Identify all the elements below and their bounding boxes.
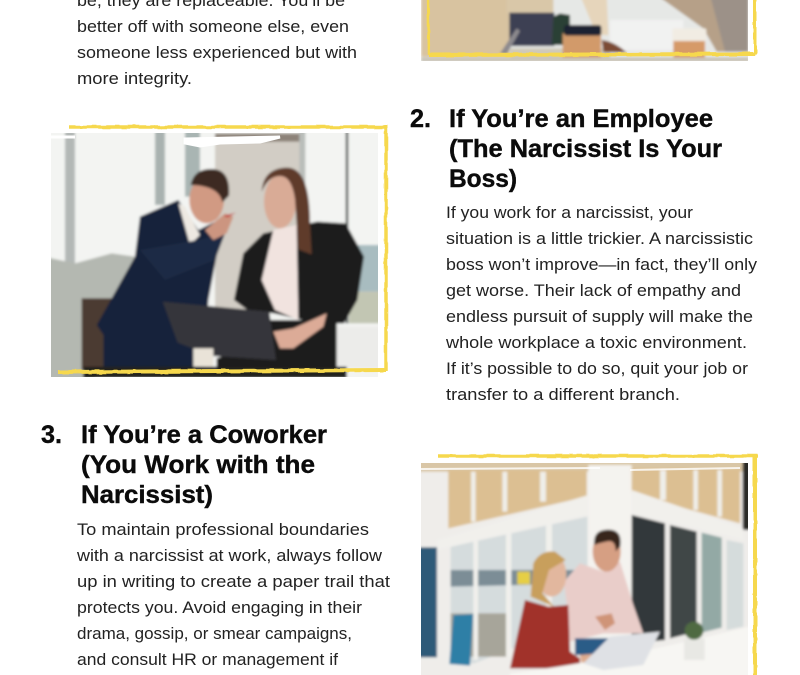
heading: point 3: If You’re a Coworker <box>81 421 327 449</box>
text block: point 3 body: and consult HR or management if <box>77 651 338 669</box>
text block: closing lines of point 1: more integrity. <box>77 70 192 88</box>
yellow brush frame: bottom photo <box>438 455 758 675</box>
text block: point 2 body: situation is a little trickier. A narcissistic <box>446 230 753 248</box>
text block: point 3 body: drama, gossip, or smear campaigns, <box>77 625 352 643</box>
text block: point 3 body <box>76 521 390 669</box>
text block: point 3 body: up in writing to create a paper trail that <box>77 573 390 591</box>
white brush strip over photo top <box>51 137 280 146</box>
heading: point 2: 2. <box>410 105 431 133</box>
photo: two colleagues in a glass office <box>414 455 758 675</box>
text block: point 2 body: get worse. Their lack of empathy and <box>446 282 741 300</box>
heading: point 2: If You’re an Employee <box>449 105 713 133</box>
photo: two colleagues in suits at a laptop <box>43 125 386 383</box>
heading: point 3: 3. <box>41 421 62 449</box>
text block: point 3 body: protects you. Avoid engaging in their <box>77 599 363 617</box>
heading: point 2: (The Narcissist Is Your <box>449 135 722 163</box>
heading: point 3: (You Work with the <box>81 451 315 479</box>
white brush strip over photo top <box>421 468 740 470</box>
text block: point 2 body: transfer to a different branch. <box>446 386 680 404</box>
heading: point 2: Boss) <box>449 165 517 193</box>
text block: point 2 body: whole workplace a toxic environment. <box>445 334 747 352</box>
yellow brush frame: top photo <box>428 0 755 55</box>
text block: point 2 body: boss won’t improve—in fact, they’ll only <box>446 256 758 274</box>
text block: point 2 body: If you work for a narcissist, your <box>446 204 694 222</box>
photo: desk with laptop and coffee cups <box>421 0 755 62</box>
text block: point 3 body: To maintain professional boundaries <box>77 521 369 539</box>
text block: point 2 body: If it’s possible to do so, quit your job or <box>446 360 749 378</box>
text block: point 2 body <box>445 204 758 404</box>
heading: point 3 <box>41 421 327 509</box>
text block: point 2 body: endless pursuit of supply will make the <box>446 308 753 326</box>
text block: closing lines of point 1: someone less experienced but with <box>77 44 357 62</box>
heading: point 3: Narcissist) <box>81 481 213 509</box>
text block: closing lines of point 1: better off with someone else, even <box>77 18 349 36</box>
text block: closing lines of point 1 <box>77 0 357 88</box>
yellow brush frame: middle photo <box>58 125 386 372</box>
heading: point 2 <box>410 105 722 193</box>
text block: point 3 body: with a narcissist at work, always follow <box>76 547 382 565</box>
